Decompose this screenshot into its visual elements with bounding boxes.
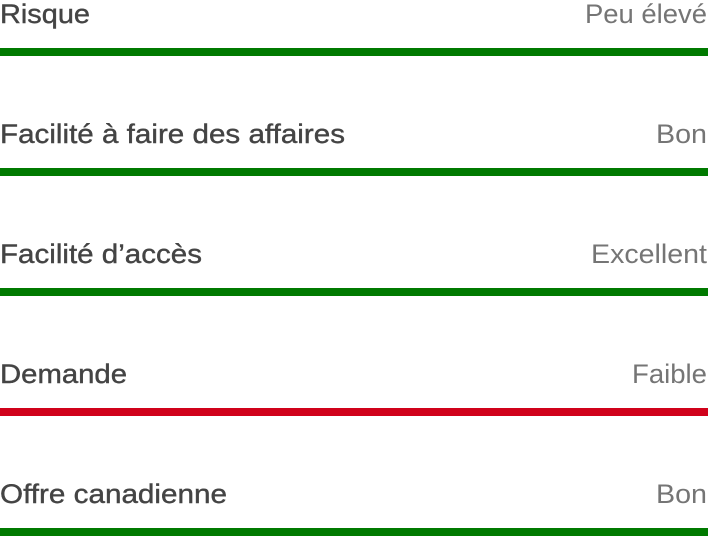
value: Faible: Faible [632, 359, 707, 389]
label: Demande: Demande [0, 359, 127, 389]
green bar [0, 168, 708, 176]
row: Facilité à faire des affaires [0, 119, 708, 176]
row: Demande [0, 359, 708, 416]
value: Bon: Bon [656, 479, 707, 509]
row: Risque [0, 0, 708, 56]
label: Facilité à faire des affaires: Facilité à faire des affaires [0, 119, 345, 149]
red bar [0, 408, 708, 416]
label: Offre canadienne: Offre canadienne [0, 479, 227, 509]
value: Excellent: Excellent [591, 239, 708, 269]
row: Offre canadienne [0, 479, 708, 536]
row: Facilité d'accès [0, 239, 708, 296]
green bar [0, 288, 708, 296]
label: Facilité d'accès: Facilité d’accès [0, 239, 202, 269]
value: Bon: Bon [656, 119, 707, 149]
green bar [0, 528, 708, 536]
green bar [0, 48, 708, 56]
